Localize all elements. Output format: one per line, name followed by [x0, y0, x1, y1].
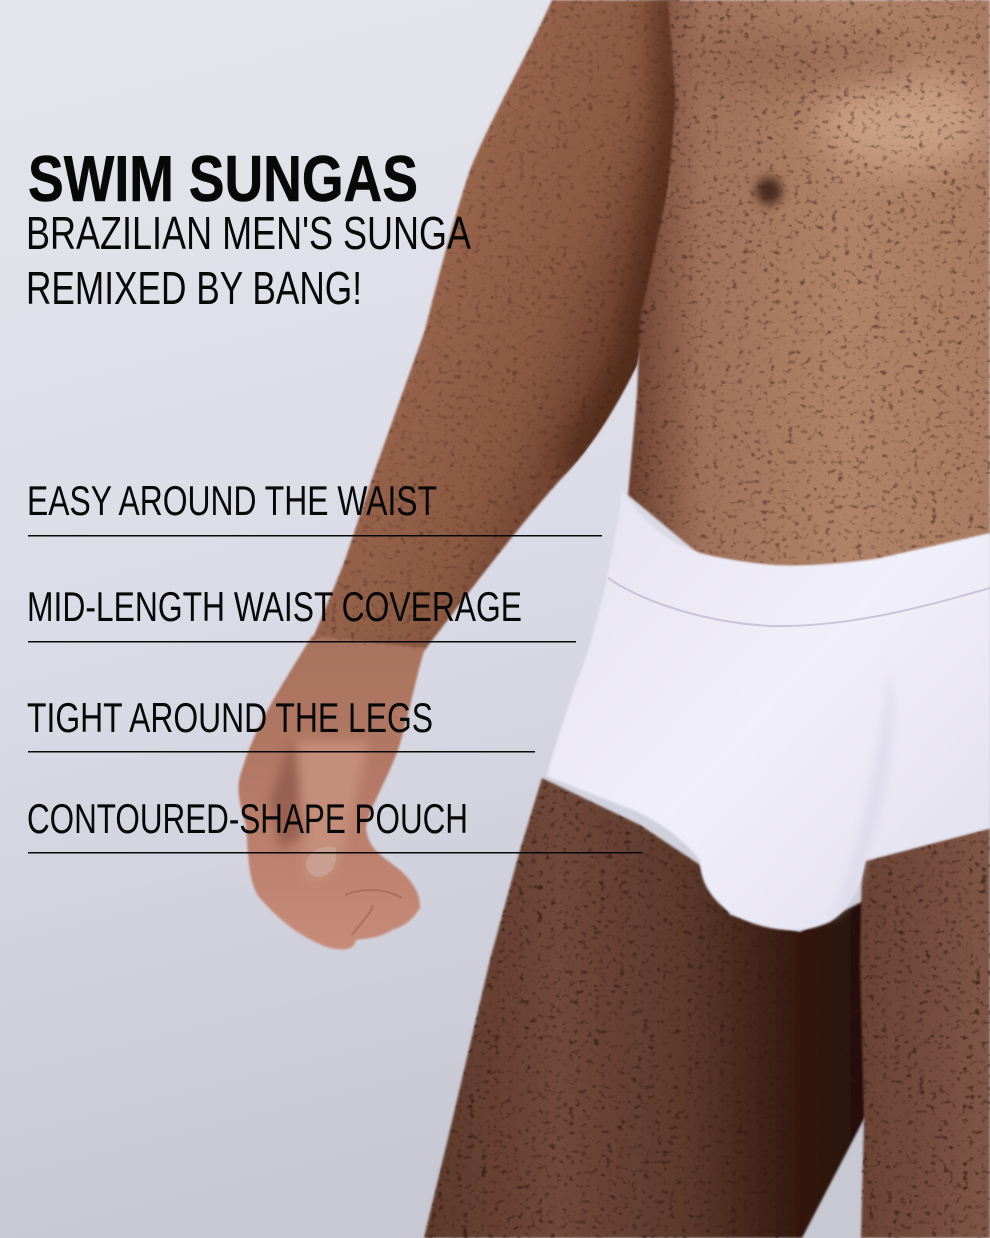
- waistband seam: [608, 578, 990, 626]
- subtitle: [26, 207, 471, 314]
- torso shading: [680, 30, 920, 90]
- arm: [312, 0, 680, 650]
- arm inner shadow: [570, 0, 672, 470]
- subtitle: REMIXED BY BANG!: [26, 262, 362, 314]
- feature: contoured-shape pouch: CONTOURED-SHAPE POUCH: [27, 795, 468, 842]
- figure: photo of model in white swim trunks: [239, 0, 990, 1238]
- hand details: thumb and finger creases: [270, 740, 402, 935]
- feature: tight around the legs: TIGHT AROUND THE LEGS: [27, 694, 433, 741]
- subtitle: BRAZILIAN MEN'S SUNGA: [26, 207, 471, 259]
- navel: [756, 177, 782, 205]
- torso: [628, 0, 990, 568]
- torso highlight: [820, 70, 990, 170]
- white swim trunks: [547, 490, 990, 930]
- feature: easy around the waist: EASY AROUND THE WAIST: [27, 477, 437, 524]
- trunks shading: [830, 660, 893, 922]
- skin texture: [312, 0, 990, 1238]
- title: SWIM SUNGAS: [28, 142, 418, 215]
- feature: mid-length waist coverage: MID-LENGTH WAIST COVERAGE: [27, 583, 522, 630]
- right leg: [860, 828, 990, 1238]
- left leg: [424, 778, 866, 1238]
- hand: [239, 636, 425, 949]
